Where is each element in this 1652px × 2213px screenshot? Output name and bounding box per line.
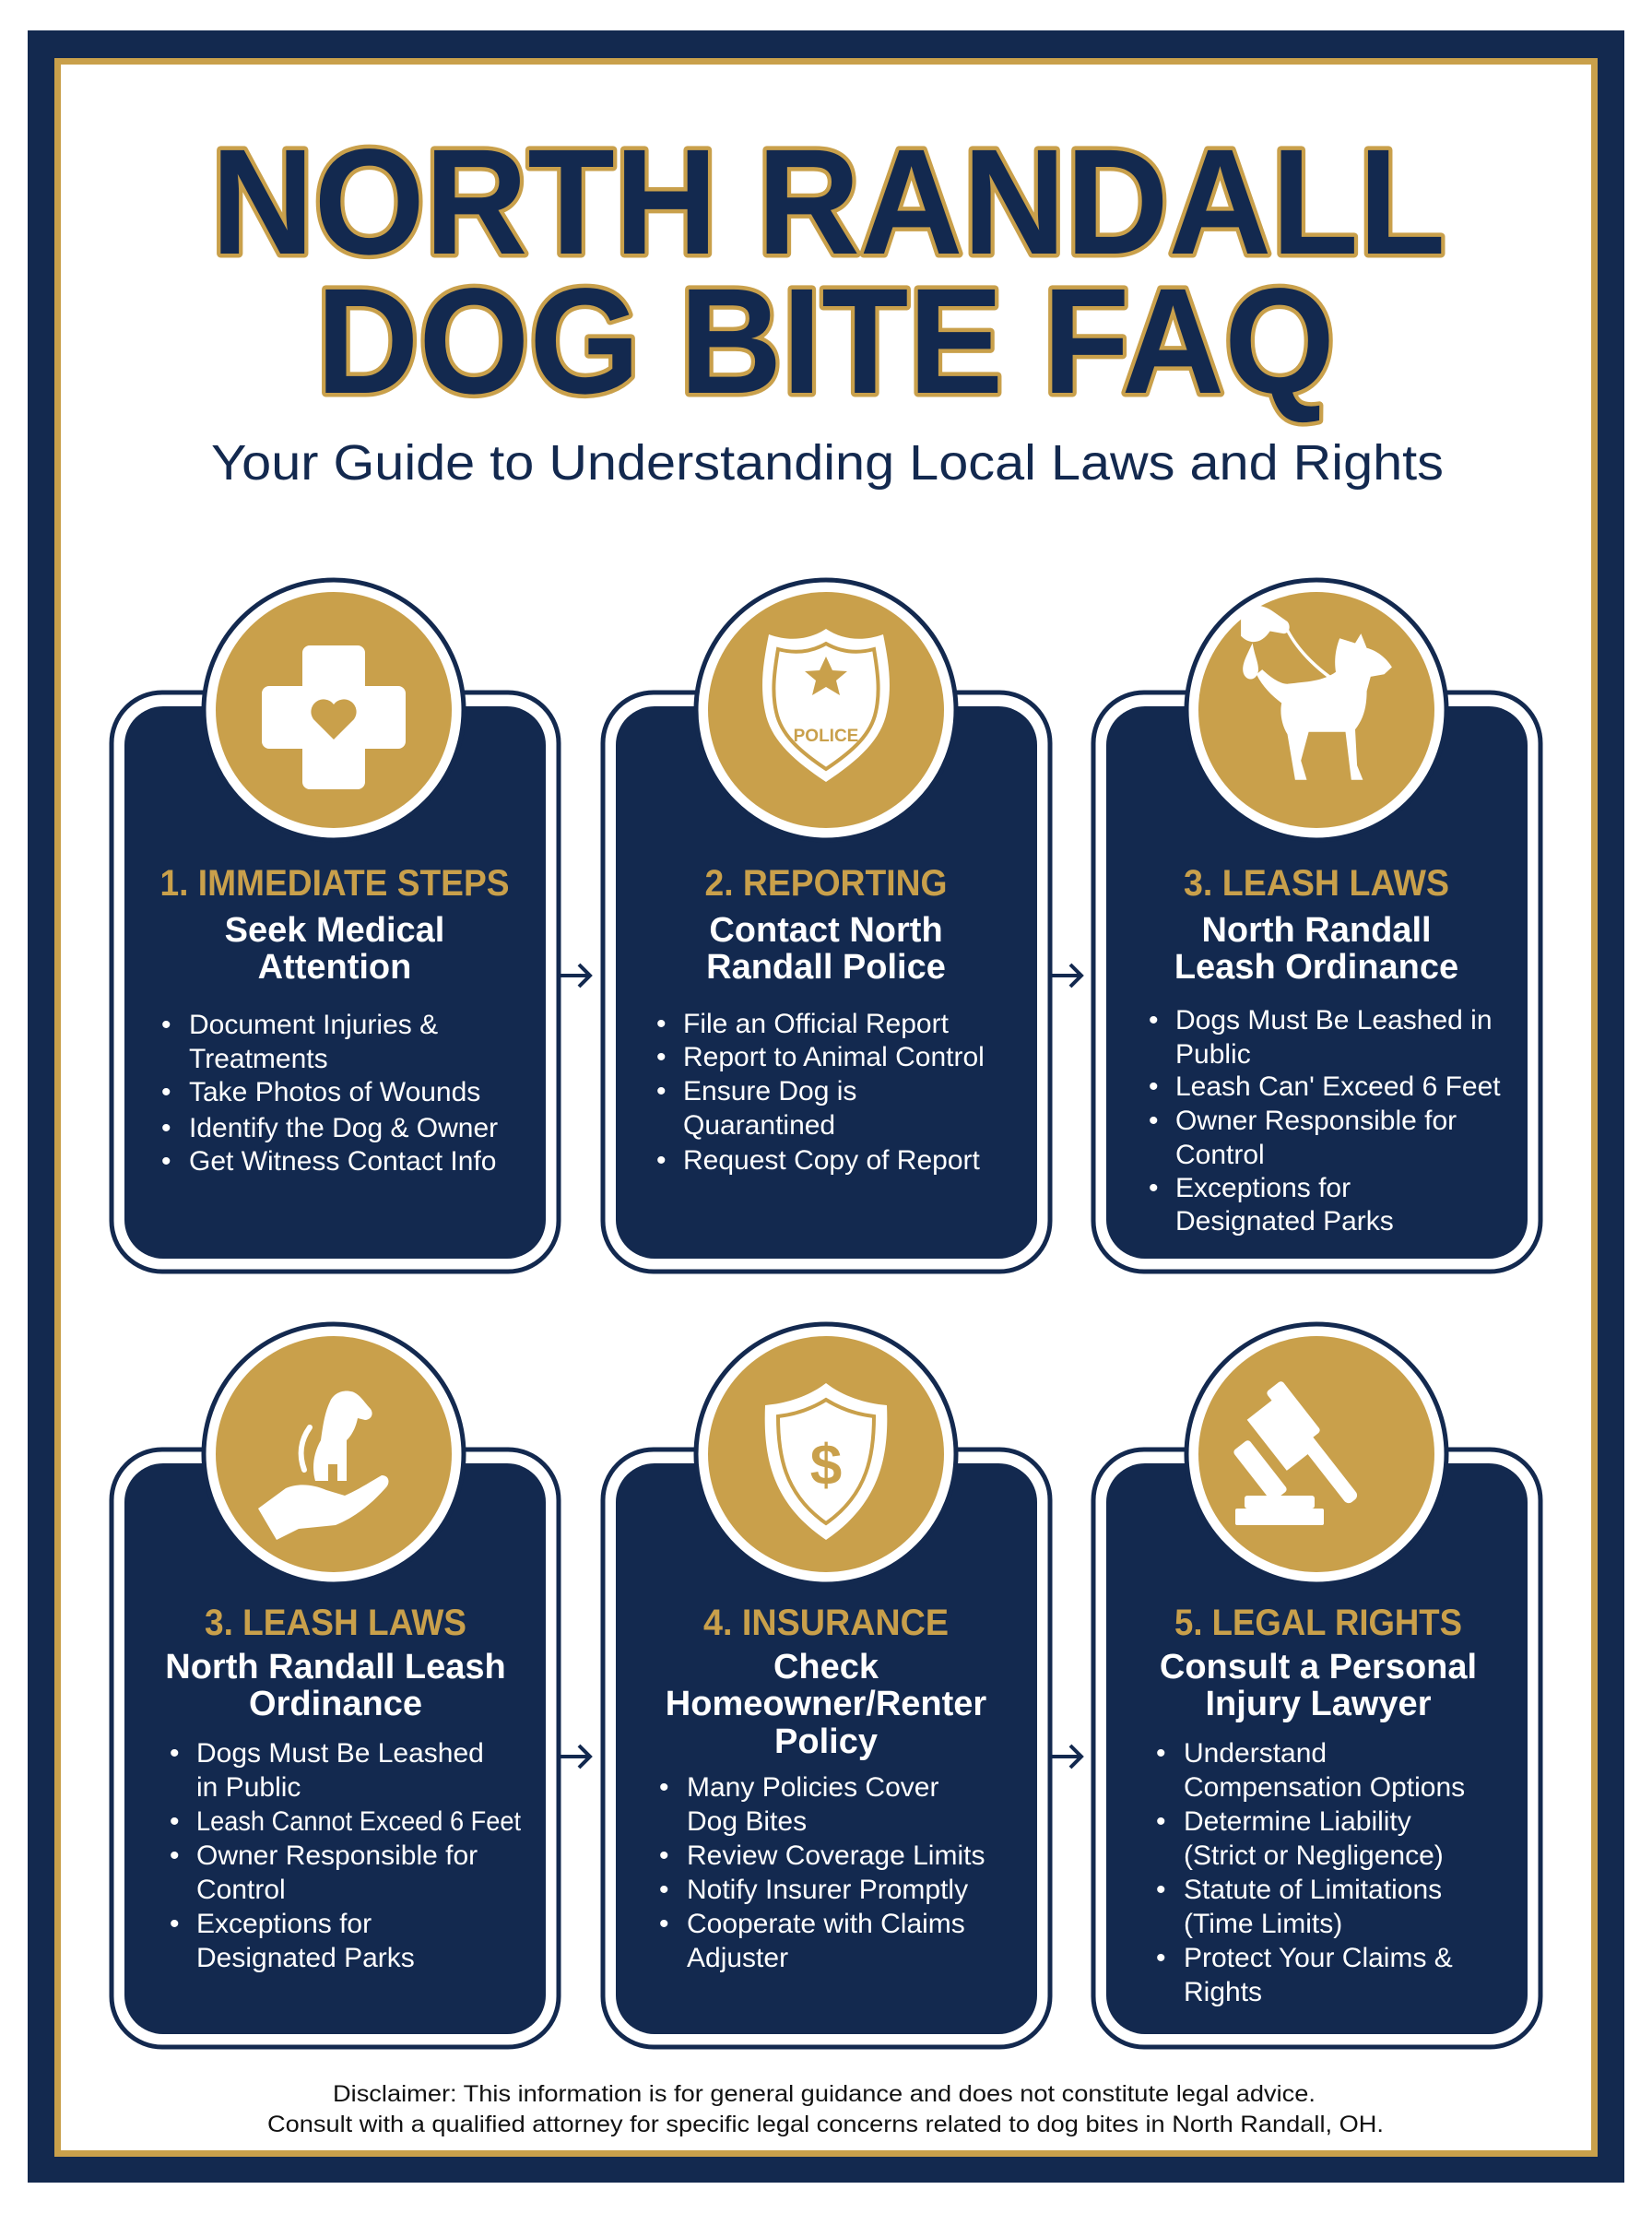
subheading: contact police: Contact North bbox=[709, 911, 943, 950]
subheading: check policy: Check bbox=[773, 1648, 879, 1686]
bullet list: Dogs Must Be Leashed bbox=[196, 1738, 484, 1769]
bullet list: Review Coverage Limits bbox=[687, 1840, 985, 1871]
subheading: leash ordinance bbox=[165, 1648, 506, 1723]
bullet list: • bbox=[659, 1875, 669, 1905]
bullet list: • bbox=[161, 1146, 171, 1177]
panel: leash laws (row 2) bbox=[112, 1324, 559, 2047]
bullet list: Control bbox=[1175, 1140, 1265, 1170]
icon: puppy on hand bbox=[258, 1391, 388, 1540]
bullet list: • bbox=[656, 1009, 667, 1039]
bullet list: Notify Insurer Promptly bbox=[687, 1875, 968, 1905]
bullet list bbox=[170, 1738, 522, 1973]
subheading: leash ordinance: Leash Ordinance bbox=[1174, 948, 1458, 987]
subheading: check policy: Policy bbox=[774, 1722, 878, 1761]
subheading: consult lawyer: Consult a Personal bbox=[1160, 1648, 1477, 1686]
bullet list: • bbox=[656, 1145, 667, 1176]
bullet list bbox=[1156, 1738, 1465, 2007]
bullet list: Many Policies Cover bbox=[687, 1772, 938, 1803]
bullet list: • bbox=[656, 1042, 667, 1072]
bullet list: • bbox=[659, 1909, 669, 1939]
icon: shield with dollar bbox=[765, 1383, 887, 1540]
disclaimer bbox=[267, 2081, 1384, 2137]
heading: 5. legal rights: 5. LEGAL RIGHTS bbox=[1174, 1603, 1462, 1643]
bullet list bbox=[659, 1772, 985, 1973]
bullet list: Cooperate with Claims bbox=[687, 1909, 965, 1939]
subheading: leash ordinance: North Randall Leash bbox=[165, 1648, 506, 1686]
bullet list: Ensure Dog is bbox=[683, 1076, 856, 1106]
bullet list: Owner Responsible for bbox=[196, 1840, 478, 1871]
heading: 2. reporting: 2. REPORTING bbox=[704, 863, 948, 904]
panel: reporting bbox=[603, 580, 1050, 1272]
subheading: leash ordinance bbox=[1174, 911, 1458, 987]
bullet list: Quarantined bbox=[683, 1110, 835, 1141]
bullet list: • bbox=[170, 1909, 180, 1939]
bullet list: Dogs Must Be Leashed in bbox=[1175, 1005, 1493, 1035]
bullet list: • bbox=[1156, 1875, 1166, 1905]
bullet list: Compensation Options bbox=[1184, 1772, 1465, 1803]
bullet list: Protect Your Claims & bbox=[1184, 1943, 1453, 1973]
bullet list: • bbox=[170, 1806, 180, 1837]
bullet list: • bbox=[170, 1738, 180, 1769]
arrow: 4 to 5 bbox=[559, 1746, 590, 1768]
subheading: check policy bbox=[666, 1648, 986, 1761]
bullet list bbox=[1149, 1005, 1501, 1237]
bullet list: • bbox=[1149, 1005, 1159, 1035]
subheading: consult lawyer: Injury Lawyer bbox=[1206, 1685, 1432, 1723]
bullet list: • bbox=[1156, 1806, 1166, 1837]
icon: gavel bbox=[1233, 1380, 1359, 1525]
icon: dog on leash bbox=[1241, 605, 1392, 780]
bullet list: Public bbox=[1175, 1039, 1251, 1070]
panel: leash laws (row 1) bbox=[1093, 580, 1540, 1272]
bullet list: • bbox=[161, 1077, 171, 1107]
bullet list: • bbox=[1149, 1173, 1159, 1203]
subheading: contact police bbox=[706, 911, 946, 987]
bullet list: Document Injuries & bbox=[189, 1010, 438, 1040]
arrow: 1 to 2 bbox=[559, 964, 590, 987]
icon: medical cross with heart bbox=[262, 645, 406, 789]
bullet list: Understand bbox=[1184, 1738, 1327, 1769]
subheading: check policy: Homeowner/Renter bbox=[666, 1685, 986, 1723]
bullet list: Control bbox=[196, 1875, 286, 1905]
subheading: seek medical attention: Attention bbox=[258, 948, 411, 987]
subheading: leash ordinance: Ordinance bbox=[249, 1685, 422, 1723]
panel: immediate steps bbox=[112, 580, 559, 1272]
bullet list: Identify the Dog & Owner bbox=[189, 1113, 498, 1143]
bullet list: (Time Limits) bbox=[1184, 1909, 1342, 1939]
bullet list bbox=[656, 1009, 985, 1176]
bullet list: Request Copy of Report bbox=[683, 1145, 981, 1176]
disclaimer: Consult with a qualified attorney for specific legal concerns related to dog bites in North Randall, OH. bbox=[267, 2112, 1384, 2137]
bullet list: • bbox=[170, 1840, 180, 1871]
bullet list: Treatments bbox=[189, 1044, 328, 1074]
bullet list: Designated Parks bbox=[196, 1943, 415, 1973]
bullet list: Statute of Limitations bbox=[1184, 1875, 1442, 1905]
bullet list: Determine Liability bbox=[1184, 1806, 1411, 1837]
bullet list: Dog Bites bbox=[687, 1806, 807, 1837]
heading: 3. leash laws: 3. LEASH LAWS bbox=[205, 1603, 466, 1643]
bullet list: in Public bbox=[196, 1772, 301, 1803]
title bbox=[211, 117, 1446, 425]
icon: police badge bbox=[762, 629, 890, 782]
bullet list: Designated Parks bbox=[1175, 1206, 1394, 1237]
subheading: contact police: Randall Police bbox=[706, 948, 946, 987]
bullet list: • bbox=[659, 1772, 669, 1803]
disclaimer: Disclaimer: This information is for general guidance and does not constitute legal advice. bbox=[333, 2081, 1316, 2107]
subheading: leash ordinance: North Randall bbox=[1201, 911, 1432, 950]
bullet list: • bbox=[659, 1840, 669, 1871]
icon: shield with dollar: $ bbox=[810, 1434, 842, 1497]
panel: insurance bbox=[603, 1324, 1050, 2047]
bullet list: File an Official Report bbox=[683, 1009, 950, 1039]
bullet list: Exceptions for bbox=[196, 1909, 372, 1939]
bullet list: Leash Can' Exceed 6 Feet bbox=[1175, 1071, 1501, 1102]
bullet list: Take Photos of Wounds bbox=[189, 1077, 480, 1107]
bullet list: • bbox=[161, 1010, 171, 1040]
bullet list: • bbox=[1156, 1738, 1166, 1769]
bullet list: • bbox=[161, 1113, 171, 1143]
bullet list bbox=[161, 1010, 498, 1177]
heading: 1. immediate steps: 1. IMMEDIATE STEPS bbox=[160, 863, 509, 904]
title: DOG BITE FAQ bbox=[316, 256, 1335, 425]
bullet list: Get Witness Contact Info bbox=[189, 1146, 496, 1177]
bullet list: Leash Cannot Exceed 6 Feet bbox=[196, 1806, 522, 1837]
subheading: seek medical attention: Seek Medical bbox=[225, 911, 444, 950]
bullet list: Owner Responsible for bbox=[1175, 1106, 1457, 1136]
heading: 3. leash laws: 3. LEASH LAWS bbox=[1184, 863, 1449, 904]
bullet list: • bbox=[1156, 1943, 1166, 1973]
bullet list: Adjuster bbox=[687, 1943, 788, 1973]
bullet list: (Strict or Negligence) bbox=[1184, 1840, 1444, 1871]
arrow: 2 to 3 bbox=[1050, 964, 1081, 987]
bullet list: • bbox=[1149, 1071, 1159, 1102]
heading: 4. insurance: 4. INSURANCE bbox=[703, 1603, 949, 1643]
bullet list: Rights bbox=[1184, 1977, 1262, 2007]
arrow: 5 to 6 bbox=[1050, 1746, 1081, 1768]
bullet list: • bbox=[1149, 1106, 1159, 1136]
panel: legal rights bbox=[1093, 1324, 1540, 2047]
bullet list: • bbox=[656, 1076, 667, 1106]
title: NORTH RANDALL bbox=[211, 117, 1446, 286]
bullet list: Exceptions for bbox=[1175, 1173, 1351, 1203]
icon: police badge: POLICE bbox=[794, 727, 858, 746]
subheading: consult lawyer bbox=[1160, 1648, 1477, 1723]
subtitle: Your Guide to Understanding Local Laws and Rights bbox=[211, 435, 1444, 491]
subheading: seek medical attention bbox=[225, 911, 444, 987]
bullet list: Report to Animal Control bbox=[683, 1042, 985, 1072]
